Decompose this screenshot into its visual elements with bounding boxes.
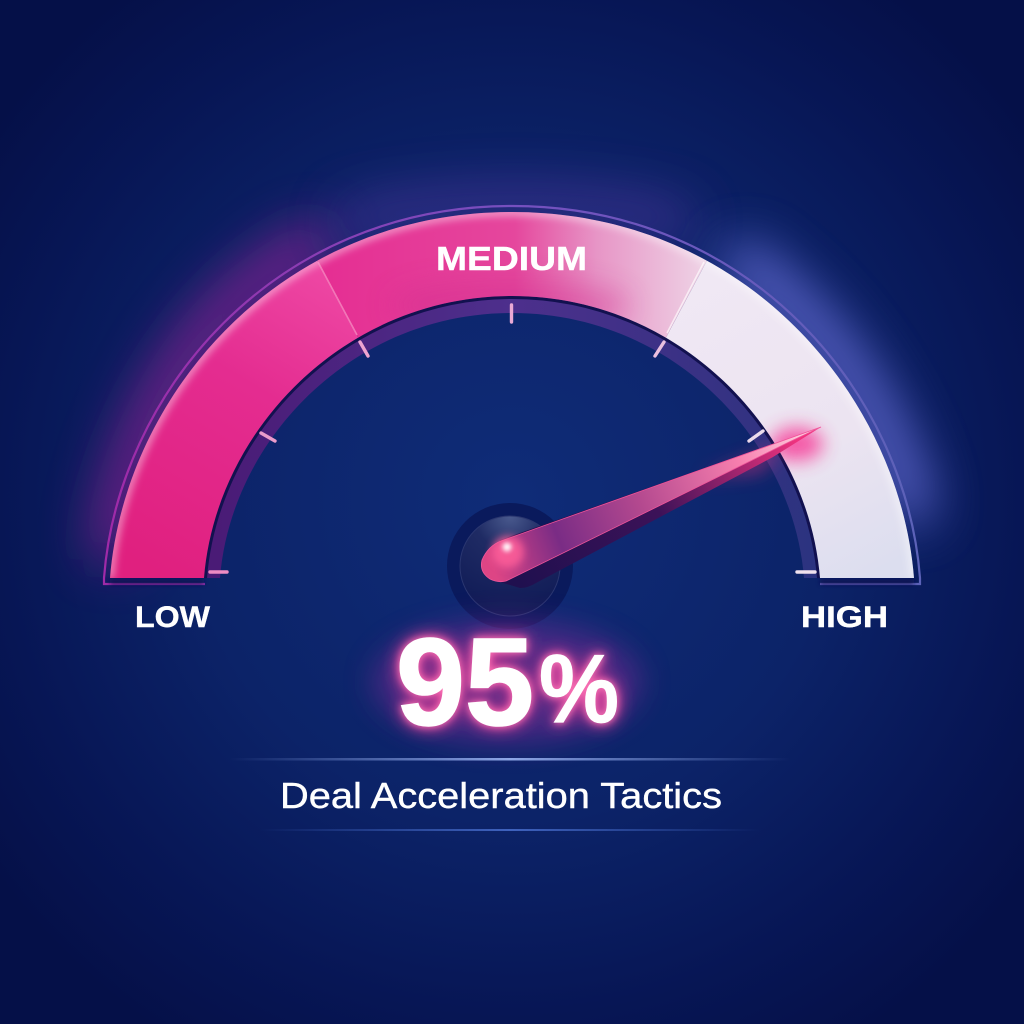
gauge	[104, 206, 920, 584]
needle	[481, 427, 821, 588]
value: 95%: %	[539, 634, 619, 743]
value: 95%: 95	[396, 614, 534, 752]
label: medium: MEDIUM	[436, 240, 587, 277]
divider: lower	[260, 829, 760, 831]
gauge glow	[112, 205, 915, 560]
needle shadow side	[500, 427, 821, 588]
band shadow	[110, 580, 914, 584]
needle highlight	[492, 536, 524, 568]
segment: low	[110, 260, 358, 578]
subtitle: Deal Acceleration Tactics	[280, 775, 722, 816]
needle tip glow on band	[771, 427, 823, 461]
outer rim	[104, 206, 920, 584]
tick marks	[210, 305, 815, 572]
label: high: HIGH	[801, 601, 888, 634]
segment: high	[666, 260, 914, 578]
needle glow	[700, 445, 785, 478]
divider: upper	[230, 758, 790, 760]
value: 95%: %	[539, 634, 619, 743]
value: 95%: 95	[396, 614, 534, 752]
needle face	[481, 427, 821, 582]
hub	[447, 503, 573, 629]
value: 95%: 95	[396, 614, 534, 752]
label: low: LOW	[135, 601, 211, 634]
value: 95%: %	[539, 634, 619, 743]
value: 95%	[372, 614, 642, 752]
inner track	[204, 296, 820, 578]
segment: medium	[317, 212, 707, 338]
segment highlights	[110, 212, 914, 578]
